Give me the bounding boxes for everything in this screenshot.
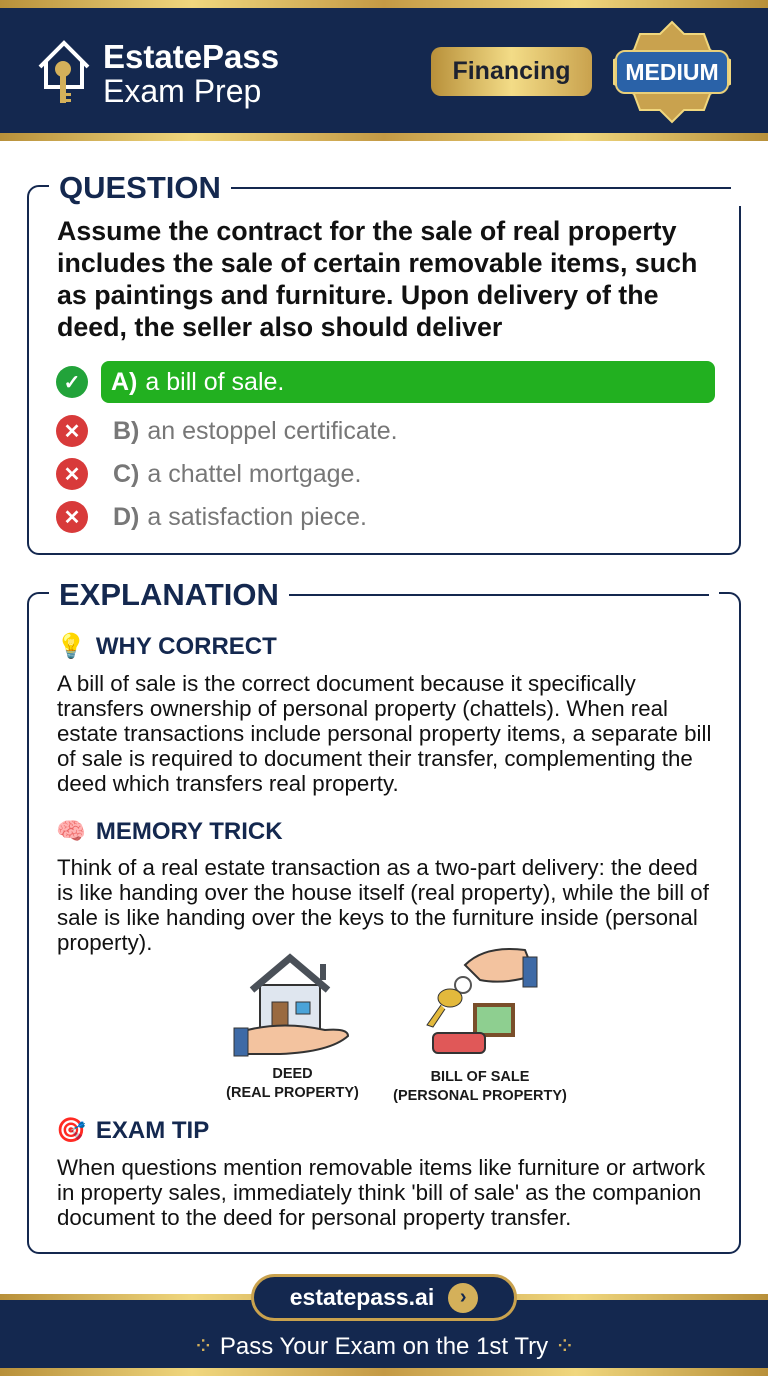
difficulty badge (613, 20, 731, 124)
option A correct (56, 361, 715, 403)
header (0, 0, 768, 141)
heading: why correct: WHY CORRECT (96, 632, 277, 660)
question text: includes the sale of certain removable items, such (57, 248, 697, 278)
illustration: bill of sale: (PERSONAL PROPERTY) (393, 1088, 567, 1104)
logo text (103, 38, 279, 109)
option C: C) a chattel mortgage. (113, 460, 361, 488)
heading: exam tip: EXAM TIP (96, 1116, 209, 1144)
illustration: bill of sale (393, 948, 567, 1104)
option B: B) an estoppel certificate. (113, 416, 398, 444)
footer (0, 1294, 768, 1376)
tagline: ⁘ Pass Your Exam on the 1st Try ⁘ (193, 1333, 575, 1360)
illustration: deed: DEED (272, 1066, 313, 1082)
illustration: deed (226, 954, 359, 1101)
text: why correct: transfers ownership of personal property (chattels). When real (57, 696, 668, 721)
question text: deed, the seller also should deliver (57, 312, 502, 342)
url pill: › (460, 1286, 467, 1308)
text: why correct: estate transactions include personal property items, a separate bill (57, 721, 711, 746)
category badge: Financing (452, 57, 571, 85)
logo text: Exam Prep (103, 73, 261, 109)
text: exam tip: When questions mention removable items like furniture or artwork (57, 1155, 705, 1180)
text: why correct: of sale is required to document their transfer, complementing the (57, 746, 693, 771)
logo icon (38, 40, 90, 103)
question text: Assume the contract for the sale of real property (57, 216, 676, 246)
illustration: bill of sale: BILL OF SALE (431, 1069, 529, 1085)
text: why correct (57, 671, 711, 796)
text: exam tip: in property sales, immediately think 'bill of sale' as the companion (57, 1180, 701, 1205)
panel: question (27, 185, 741, 555)
text: why correct: A bill of sale is the correct document because it specifically (57, 671, 636, 696)
heading: why correct: 💡 (56, 633, 86, 660)
text: memory trick (57, 855, 709, 955)
heading: memory trick: 🧠 (56, 818, 86, 845)
question text: as paintings and furniture. Upon delivery of the (57, 280, 659, 310)
illustration: deed: (REAL PROPERTY) (226, 1085, 359, 1101)
text: memory trick: sale is like handing over the keys to the furniture inside (personal (57, 905, 698, 930)
text: memory trick: is like handing over the house itself (real property), while the bill of (57, 880, 709, 905)
url pill: estatepass.ai (290, 1284, 434, 1310)
text: memory trick: property). (57, 930, 152, 955)
text: exam tip: document to the deed for personal property transfer. (57, 1205, 571, 1230)
heading: exam tip: 🎯 (56, 1117, 86, 1144)
heading: question: QUESTION (59, 170, 221, 205)
text: memory trick: Think of a real estate transaction as a two-part delivery: the deed (57, 855, 698, 880)
option A correct: A) a bill of sale. (111, 368, 284, 396)
option B: ✕ (64, 420, 80, 442)
url pill (251, 1274, 517, 1321)
text: exam tip (57, 1155, 706, 1230)
heading: explanation: EXPLANATION (59, 577, 279, 612)
option D: D) a satisfaction piece. (113, 502, 367, 530)
panel: explanation (27, 592, 741, 1254)
text: why correct: deed which transfers real property. (57, 771, 399, 796)
option D: ✕ (64, 506, 80, 528)
option A correct: ✓ (64, 372, 80, 394)
category badge (431, 47, 592, 96)
heading: explanation (49, 577, 719, 613)
difficulty badge: MEDIUM (625, 58, 719, 84)
logo text: EstatePass (103, 38, 279, 75)
heading: memory trick: MEMORY TRICK (96, 818, 283, 844)
question text (57, 216, 697, 342)
option C: ✕ (64, 464, 80, 486)
heading: question (49, 170, 741, 206)
